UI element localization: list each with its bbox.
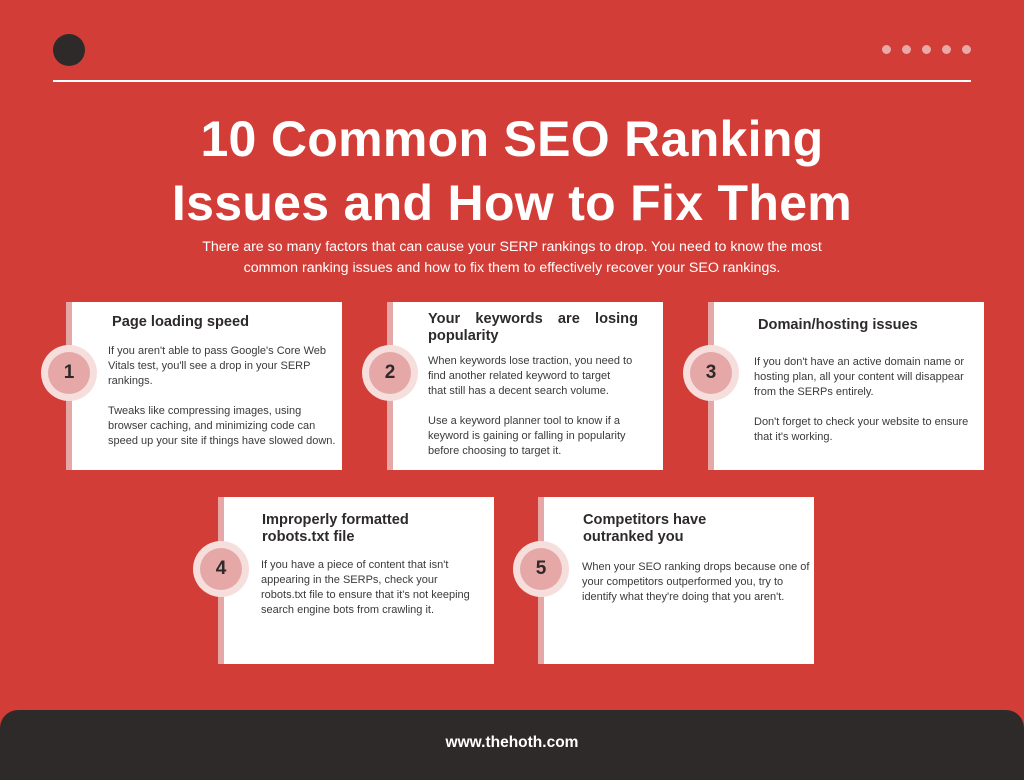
card 3: If you don't have an active domain name or	[754, 356, 964, 368]
card 3: that it's working.	[754, 431, 833, 443]
icon: number 2: 2	[385, 362, 395, 383]
card 5: outranked you	[583, 529, 684, 545]
card 5	[538, 497, 814, 664]
icon: number 1	[41, 345, 97, 401]
card 2: When keywords lose traction, you need to	[428, 355, 632, 367]
card 2: keyword is gaining or falling in popularity	[428, 430, 626, 442]
title: 10 Common SEO Ranking	[200, 111, 824, 167]
card 2: popularity	[428, 328, 499, 344]
icon: number 3	[683, 345, 739, 401]
icon: number 4	[193, 541, 249, 597]
subtitle: There are so many factors that can cause your SERP rankings to drop. You need to know the most	[202, 239, 822, 255]
icon: number 5	[513, 541, 569, 597]
icon: number 2	[362, 345, 418, 401]
card 2: find another related keyword to target	[428, 370, 610, 382]
card 4: If you have a piece of content that isn't	[261, 559, 448, 571]
icon: number 3: 3	[706, 362, 716, 383]
card 1: If you aren't able to pass Google's Core Web	[108, 345, 326, 357]
card 3: from the SERPs entirely.	[754, 386, 874, 398]
card 5: Competitors have	[583, 512, 706, 528]
title: Issues and How to Fix Them	[172, 175, 852, 231]
card 2	[387, 302, 663, 470]
card 1	[66, 302, 342, 470]
card 4: robots.txt file to ensure that it's not keeping	[261, 589, 470, 601]
card 5: identify what they're doing that you aren't.	[582, 591, 784, 603]
card 4: robots.txt file	[262, 529, 354, 545]
card 1: speed up your site if things have slowed down.	[108, 435, 335, 447]
card 2: Use a keyword planner tool to know if a	[428, 415, 620, 427]
icon: number 1: 1	[64, 362, 74, 383]
card 5: your competitors outperformed you, try to	[582, 576, 783, 588]
icon: number 5: 5	[536, 558, 546, 579]
card 1: browser caching, and minimizing code can	[108, 420, 315, 432]
card 2: before choosing to target it.	[428, 445, 561, 457]
subtitle	[202, 239, 822, 276]
card 1: Vitals test, you'll see a drop in your SERP	[108, 360, 310, 372]
card 3: Don't forget to check your website to ensure	[754, 416, 968, 428]
logo dot	[53, 34, 85, 66]
card 4: Improperly formatted	[262, 512, 409, 528]
card 1: Page loading speed	[112, 314, 249, 330]
card 3	[708, 302, 984, 470]
icon: number 4: 4	[216, 558, 226, 579]
card 5: When your SEO ranking drops because one of	[582, 561, 809, 573]
footer	[0, 710, 1024, 780]
dots decoration	[882, 45, 971, 54]
footer: www.thehoth.com	[446, 734, 578, 751]
card 1: Tweaks like compressing images, using	[108, 405, 301, 417]
card 2: that still has a decent search volume.	[428, 385, 609, 397]
card 3: hosting plan, all your content will disappear	[754, 371, 964, 383]
card 3: Domain/hosting issues	[758, 317, 918, 333]
card 1: rankings.	[108, 375, 153, 387]
card 4: search engine bots from crawling it.	[261, 604, 434, 616]
subtitle: common ranking issues and how to fix them to effectively recover your SEO rankings.	[244, 260, 780, 276]
card 4: appearing in the SERPs, check your	[261, 574, 438, 586]
title	[172, 111, 852, 231]
card 2: Your keywords are losing	[428, 311, 638, 327]
card 4	[218, 497, 494, 664]
